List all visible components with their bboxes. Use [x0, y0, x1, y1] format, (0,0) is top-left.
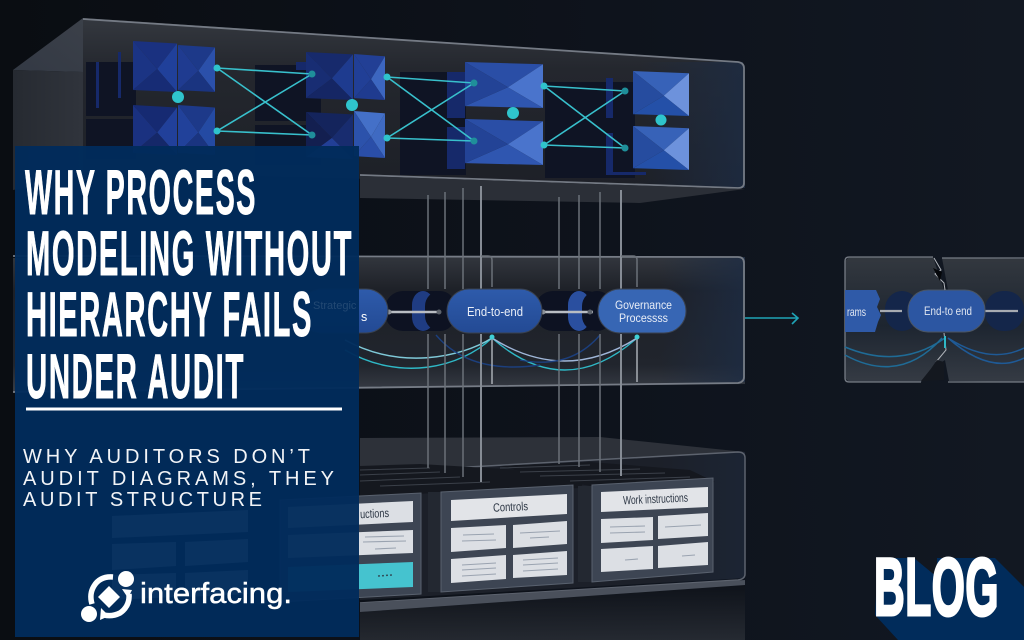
card: procedures and left work instructions: uctions [360, 506, 389, 521]
fractured curves [845, 338, 1024, 367]
panel: fractured shelf [845, 257, 1024, 382]
cracks [921, 258, 946, 381]
pill: strategic objectives [300, 289, 388, 333]
pill: strategic objectives: s [361, 310, 367, 324]
dependency curves [345, 335, 637, 370]
pill: governance processes [598, 289, 686, 333]
subtitle: AUDIT STRUCTURE [23, 489, 262, 511]
card: controls [441, 485, 573, 592]
logo: interfacing [81, 571, 292, 622]
title: WHY PROCESS [25, 158, 257, 228]
subtitle [23, 446, 334, 511]
title: UNDER AUDIT [26, 342, 245, 412]
floor reflection [360, 585, 745, 640]
panel: top glass shelf [13, 18, 745, 203]
subtitle: AUDIT DIAGRAMS, THEY [23, 468, 334, 490]
cubes column 3 [465, 62, 543, 165]
blog ribbon [875, 558, 1024, 640]
stacked card slats [360, 462, 715, 496]
logo wordmark: interfacing. [140, 578, 292, 610]
logo icon [81, 571, 134, 622]
blue edges of cube backs [96, 52, 646, 175]
broken pill: diagrams [845, 290, 881, 332]
faint text: strategic objectives: Strategic [313, 300, 357, 312]
card: procedures and left work instructions [112, 493, 421, 602]
pill: governance processes: Governance [615, 298, 672, 312]
panel: middle glass shelf [13, 256, 745, 392]
cubes column 4 [633, 71, 689, 170]
vertical connector rods [428, 186, 637, 482]
title [25, 158, 353, 412]
tile: controls title: Controls [493, 499, 528, 515]
title: HIERARCHY FAILS [26, 280, 313, 350]
pill: end-to-end broken [908, 290, 985, 332]
card: work instructions [592, 478, 713, 582]
dark cube backs [86, 62, 635, 178]
text: MODELING WITHOUT [26, 219, 353, 289]
pill: governance processes: Processss [619, 311, 668, 325]
tile: work instructions title: Work instructions [623, 491, 688, 507]
cubes column 2 [306, 52, 385, 159]
cubes column 1 [133, 41, 215, 155]
pill: end-to-end: End-to-end [467, 305, 523, 319]
arrow [745, 313, 798, 324]
title rule [26, 408, 342, 410]
connector bars between pills [386, 310, 640, 340]
network nodes [172, 64, 666, 152]
dark cylinders behind [885, 291, 919, 331]
pill: end-to-end broken: End-to end [924, 304, 972, 318]
panel: title block [15, 146, 359, 637]
subtitle: WHY AUDITORS DON’T [23, 446, 310, 468]
dark cylinder stack [385, 291, 612, 331]
panel: bottom glass shelf [112, 437, 745, 612]
network links [217, 68, 625, 148]
broken pill: diagrams: rams [847, 305, 866, 319]
pill: end-to-end [447, 289, 542, 333]
